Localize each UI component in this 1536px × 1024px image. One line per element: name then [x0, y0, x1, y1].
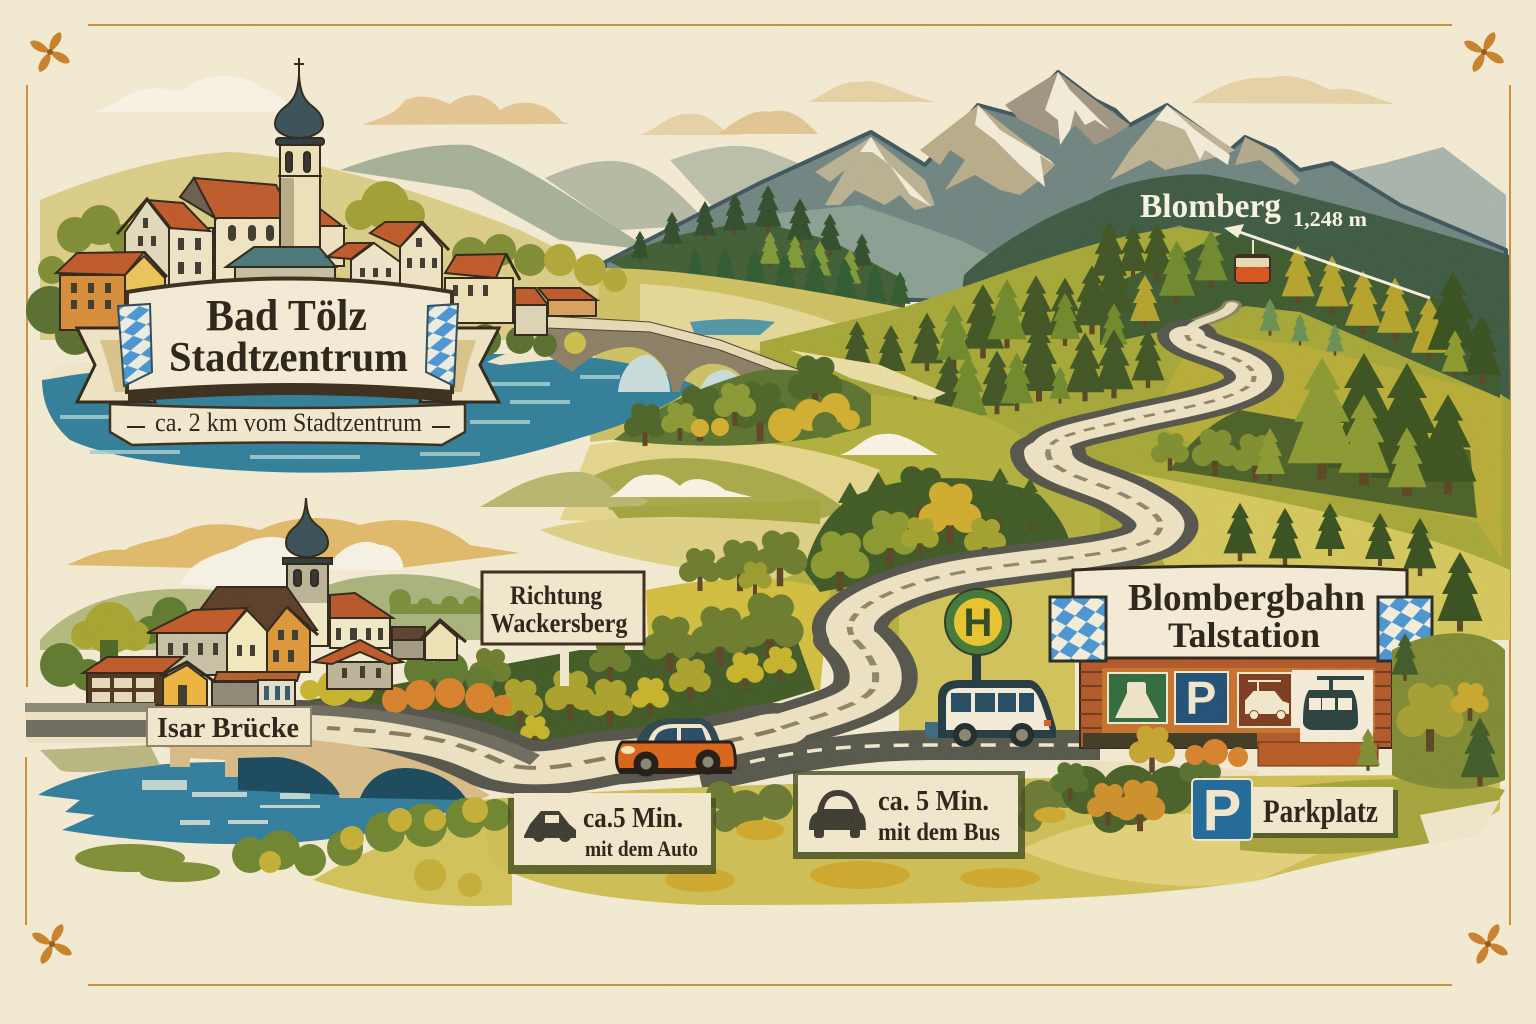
small riverside houses [515, 288, 597, 335]
lower left hills and clouds [40, 518, 520, 650]
time box: by car: ca.5 Min. [583, 803, 683, 834]
Blomberg main hill [760, 227, 1510, 640]
title banner: Bad Tölz [77, 278, 499, 445]
upper river [42, 319, 775, 473]
station name board [1073, 566, 1407, 658]
icon: small car [524, 811, 576, 842]
bus stop sign [945, 589, 1011, 684]
left forest band [610, 185, 910, 310]
banner title: Stadtzentrum [169, 335, 408, 381]
far right house [445, 254, 520, 323]
blue roof building [226, 247, 336, 292]
tree belt along lower road [310, 593, 815, 746]
branch road to station [700, 745, 1260, 790]
main panel [127, 278, 452, 392]
winding road to Blomberg [300, 305, 1254, 768]
riverside bush band [614, 355, 871, 446]
middle meadows [480, 394, 1100, 750]
lower houses [83, 607, 466, 706]
white bus [925, 680, 1056, 744]
icon: brown vehicle [1238, 673, 1292, 727]
orange car [616, 718, 735, 774]
mid forest cluster [679, 466, 1070, 596]
summit name: Blomberg [1140, 188, 1281, 225]
lane dashes [1048, 335, 1254, 452]
lower tower [283, 498, 332, 646]
time box: by car: mit dem Auto [585, 836, 698, 861]
sign: Richtung Wackersberg: Richtung [510, 581, 602, 610]
station name board: Talstation [1168, 615, 1320, 655]
banner title: Bad Tölz [206, 291, 367, 340]
lower nave [200, 587, 393, 648]
parking sign: Parkplatz [1263, 794, 1378, 830]
Blomberg dark ridge [960, 174, 1510, 405]
Bavarian flag left [118, 304, 152, 386]
road casing [1187, 305, 1232, 335]
far hills [40, 145, 1506, 340]
icon: blue parking [1175, 672, 1228, 724]
time box: by bus [793, 771, 1025, 859]
icon: gondola [1292, 670, 1373, 742]
ribbon tails [77, 328, 499, 402]
summit name [1140, 188, 1368, 231]
Isar Brücke label: Isar Brücke [157, 712, 299, 744]
icon: green mountain station [1108, 673, 1167, 723]
lower left trees [40, 597, 512, 715]
cable car arrow [1224, 224, 1430, 298]
lower river [38, 745, 470, 844]
white house [327, 243, 400, 292]
bus stop sign: H [964, 601, 992, 645]
parking sign: P [1203, 778, 1241, 843]
parking sign [1192, 778, 1398, 843]
distance subtitle [110, 404, 465, 445]
summit name: 1,248 m [1293, 207, 1368, 231]
icon: blue parking: P [1186, 672, 1216, 724]
house orange [56, 252, 167, 330]
distance subtitle: ca. 2 km vom Stadtzentrum [155, 408, 422, 437]
Bavarian flag left [1050, 597, 1106, 661]
time box: by bus: mit dem Bus [878, 819, 1000, 846]
clouds [93, 76, 1395, 135]
trees by the station [1051, 633, 1505, 833]
Blomberg summit label, arrow and gondola [1140, 188, 1430, 298]
gondola [1234, 240, 1271, 284]
Blombergbahn valley station [1050, 566, 1432, 766]
lower stone bridge [150, 740, 490, 805]
nave and roof [180, 178, 345, 295]
Bavarian flag right [426, 304, 458, 386]
time box: by bus: ca. 5 Min. [878, 785, 989, 817]
lower road on left bank [25, 703, 540, 765]
station name board: Blombergbahn [1128, 577, 1365, 619]
upper town trees [26, 181, 627, 358]
pale hills behind bridge [590, 268, 940, 442]
mountains with snow caps [605, 72, 1506, 300]
house right [370, 222, 449, 290]
banner title [169, 291, 408, 381]
foreground meadows [75, 772, 1505, 906]
time box: by car [508, 793, 716, 874]
sign: Richtung Wackersberg [482, 572, 644, 686]
house A [117, 199, 213, 300]
church tower [275, 58, 324, 247]
wooden building [1080, 658, 1392, 766]
evergreen forest on Blomberg hill [842, 221, 1502, 632]
sign: Richtung Wackersberg: Wackersberg [490, 608, 628, 638]
lower right pine cluster [1151, 353, 1477, 518]
upper town with church [56, 58, 597, 335]
Bavarian flag right [1378, 597, 1432, 661]
panel shadow [128, 385, 452, 402]
icon: front car [809, 790, 866, 838]
lower town with church [83, 498, 466, 706]
upper stone bridge [547, 316, 946, 400]
road surface [1187, 305, 1232, 335]
